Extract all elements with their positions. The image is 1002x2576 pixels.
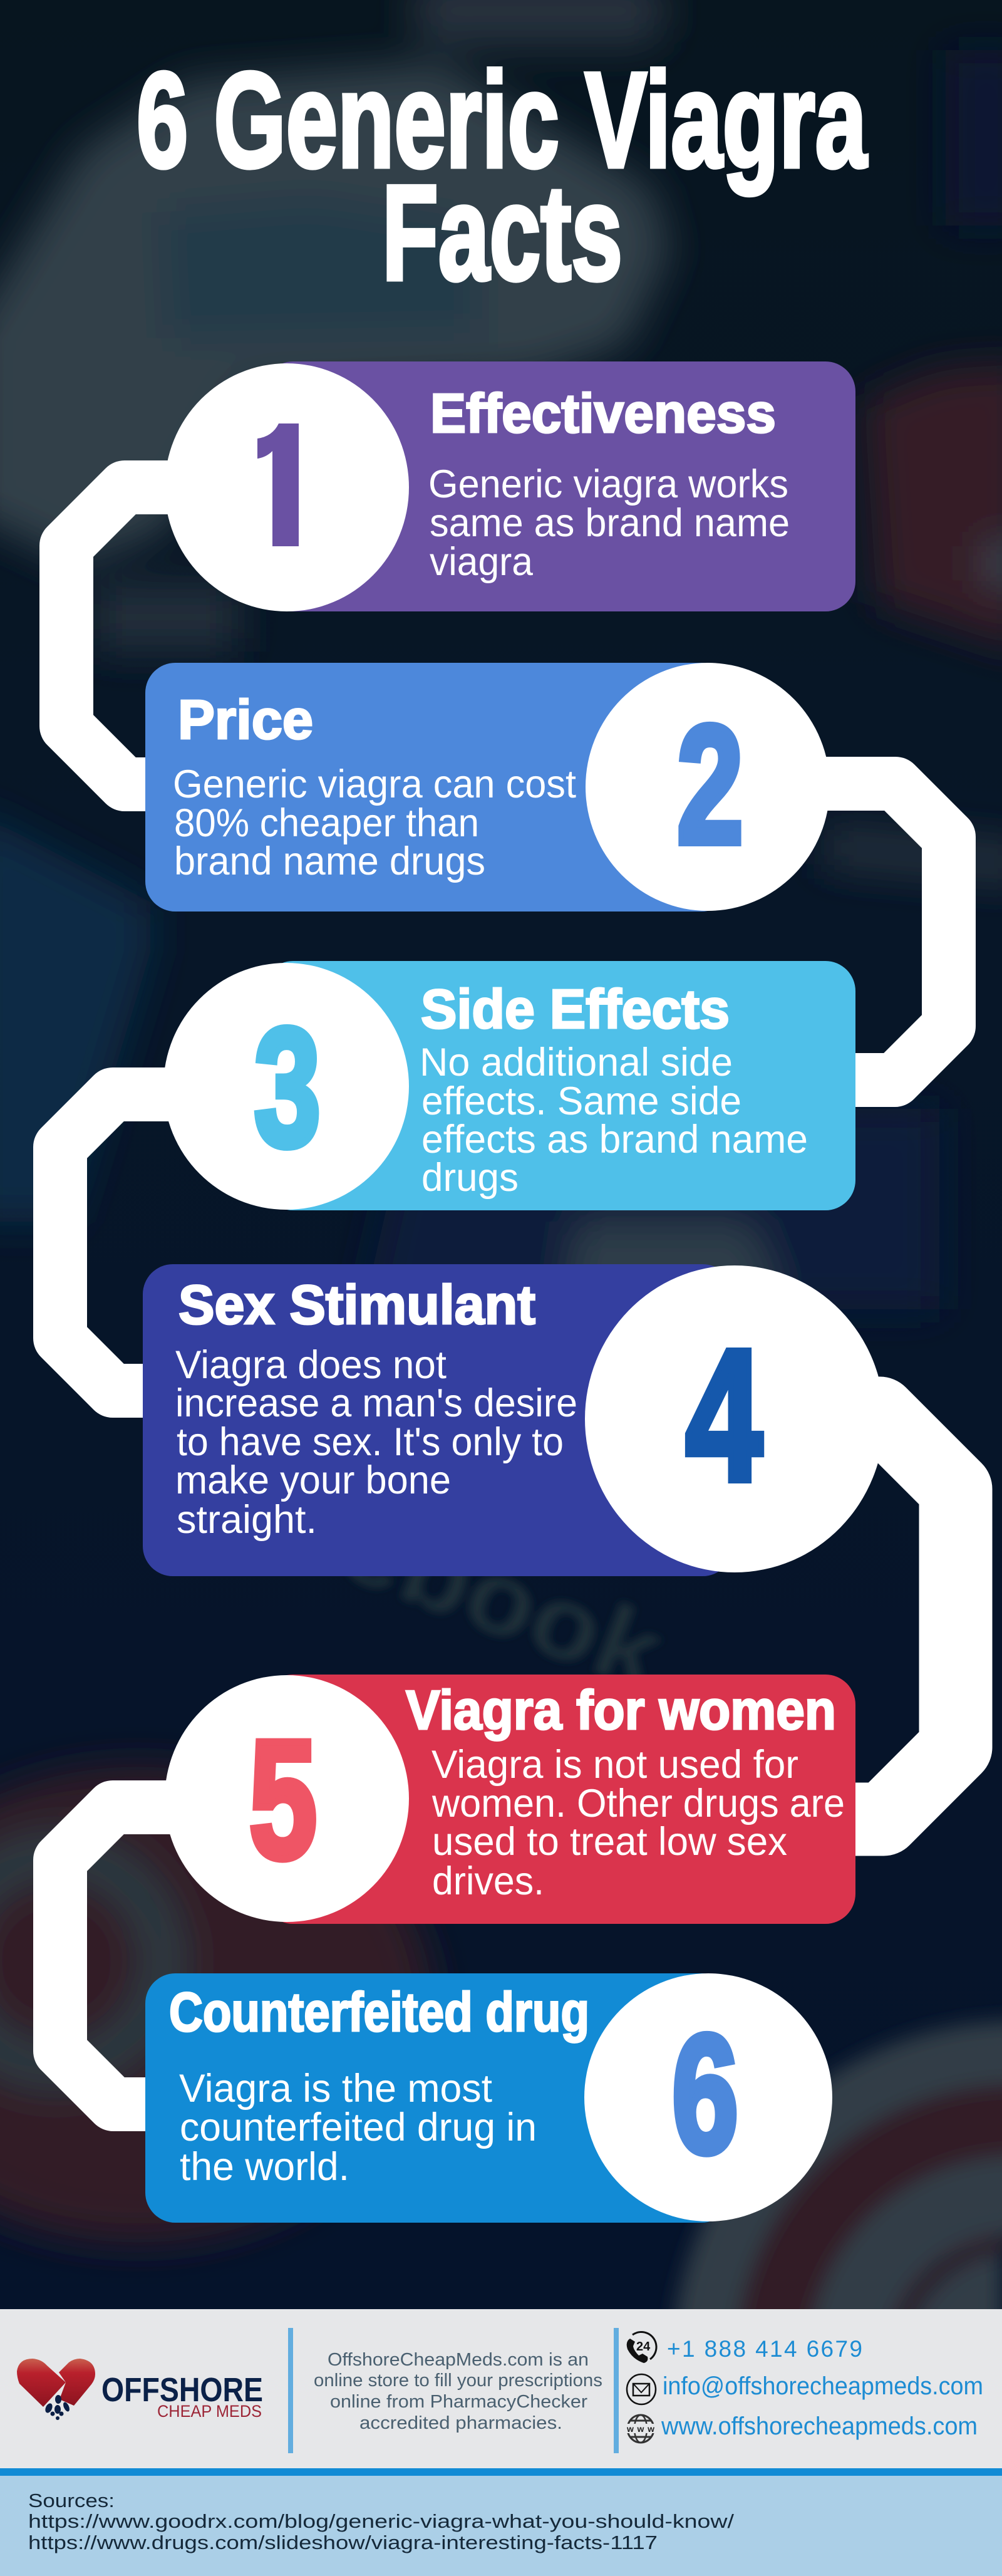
number 5: 5 (249, 1705, 317, 1893)
footer background (0, 2309, 1002, 2468)
heading: Sex Stimulant (178, 1274, 535, 1336)
panel: step 6 counterfeited drug (145, 1973, 832, 2223)
heading: Viagra for women (406, 1679, 836, 1741)
number 3: 3 (254, 993, 321, 1181)
icon: globe www: www (626, 2424, 654, 2434)
body text: 80% cheaper than (174, 801, 479, 845)
company description (314, 2350, 602, 2433)
number 4: 4 (686, 1311, 763, 1520)
company description: online from PharmacyChecker (330, 2392, 587, 2412)
body text (420, 1041, 808, 1200)
card background (143, 1264, 733, 1576)
body text: Viagra is the most (179, 2067, 492, 2111)
icon: 24 hour phone (627, 2332, 656, 2363)
body text: drugs (421, 1156, 519, 1200)
card background (263, 961, 855, 1210)
number 6: 6 (672, 2000, 738, 2188)
body text: women. Other drugs are (431, 1782, 845, 1826)
number 2: 2 (677, 690, 743, 878)
number circle (163, 963, 409, 1210)
body text: straight. (177, 1498, 317, 1542)
divider left (288, 2328, 293, 2453)
body text: brand name drugs (174, 839, 485, 883)
sources: Sources: (28, 2490, 115, 2511)
email address: info@offshorecheapmeds.com (663, 2372, 983, 2400)
card background (145, 663, 731, 911)
logo (17, 2359, 263, 2421)
title: Facts (382, 157, 622, 308)
sources background (0, 2476, 1002, 2576)
connector: step 3 to step 4 (60, 1094, 188, 1391)
body text: Generic viagra can cost (173, 762, 576, 806)
icon: 24 hour phone: 24 (636, 2340, 651, 2354)
heading: Counterfeited drug (169, 1981, 589, 2043)
blurred photo background: ebook (327, 1485, 678, 1712)
divider right (614, 2328, 619, 2453)
heading: Effectiveness (430, 382, 776, 444)
body text: Viagra does not (175, 1343, 447, 1387)
number circle (165, 363, 409, 611)
body text (175, 1343, 577, 1542)
panel: step 5 viagra for women (165, 1675, 855, 1924)
card background (263, 361, 855, 611)
icon: globe www (626, 2415, 655, 2443)
body text (179, 2067, 537, 2189)
phone number: +1 888 414 6679 (667, 2336, 862, 2362)
panel: footer (0, 2309, 1002, 2576)
body text: make your bone (175, 1458, 451, 1502)
connector: step 5 to step 6 (60, 1807, 188, 2104)
panel: step 2 price (145, 663, 830, 911)
sources (28, 2490, 734, 2553)
body text: same as brand name (430, 501, 790, 545)
connector: step 4 to step 5 (814, 1413, 956, 1819)
footer rule (0, 2468, 1002, 2476)
website address: www.offshorecheapmeds.com (661, 2412, 978, 2440)
panel: step 3 side effects (163, 961, 855, 1210)
body text: counterfeited drug in (180, 2106, 537, 2149)
card background (263, 1675, 855, 1924)
company description: accredited pharmacies. (359, 2413, 562, 2433)
body text: No additional side (420, 1041, 733, 1084)
connector: step 1 to step 2 (66, 487, 188, 784)
logo tagline: CHEAP MEDS (157, 2402, 262, 2421)
body text (173, 762, 576, 883)
body text: Generic viagra works (428, 462, 788, 506)
number circle (584, 1973, 832, 2221)
icon: email (627, 2374, 656, 2404)
body text (431, 1743, 845, 1903)
number circle (586, 663, 830, 911)
body text: increase a man's desire (175, 1381, 577, 1425)
panel: step 4 sex stimulant (143, 1264, 884, 1576)
body text: effects. Same side (421, 1079, 741, 1123)
company description: OffshoreCheapMeds.com is an (328, 2350, 589, 2370)
number circle (585, 1265, 884, 1572)
body text: drives. (432, 1859, 544, 1903)
heading: Side Effects (421, 978, 730, 1040)
heading: Price (178, 688, 313, 750)
sources: https://www.drugs.com/slideshow/viagra-interesting-facts-1117 (28, 2532, 658, 2553)
body text: Viagra is not used for (431, 1743, 798, 1787)
sources: https://www.goodrx.com/blog/generic-viagra-what-you-should-know/ (28, 2510, 734, 2532)
body text: effects as brand name (421, 1118, 808, 1161)
body text: viagra (430, 540, 534, 584)
card background (145, 1973, 731, 2223)
title (137, 44, 867, 308)
body text: the world. (180, 2145, 349, 2189)
number circle (165, 1675, 409, 1922)
panel: step 1 effectiveness (165, 361, 855, 611)
connector: step 2 to step 3 (802, 784, 949, 1080)
icon: heart capsule logo (17, 2359, 95, 2420)
company description: online store to fill your prescriptions (314, 2371, 602, 2391)
body text: to have sex. It's only to (177, 1420, 564, 1464)
number 1: 1 (230, 390, 337, 588)
logo wordmark: OFFSHORE (101, 2371, 263, 2409)
body text (428, 462, 790, 584)
body text: used to treat low sex (432, 1820, 787, 1864)
